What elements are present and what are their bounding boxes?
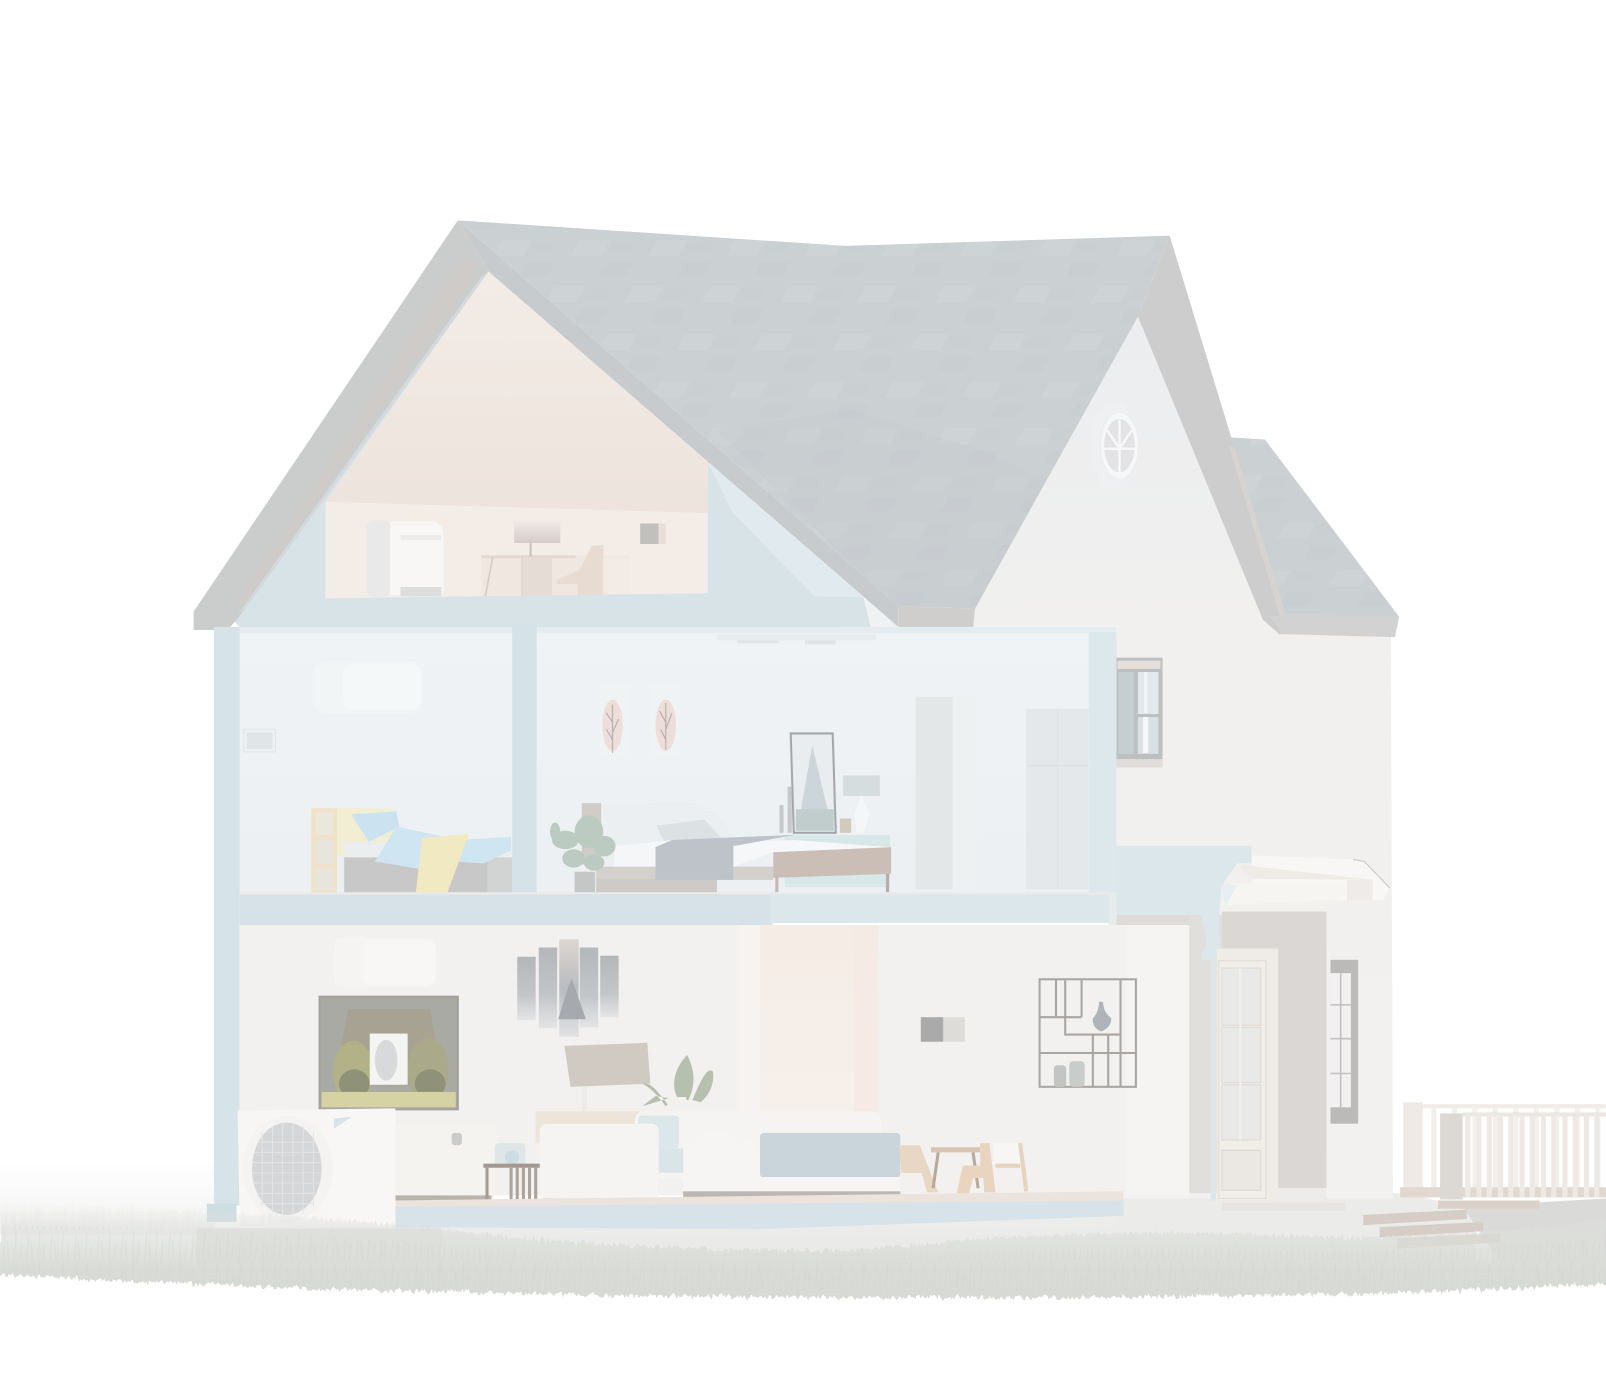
porch overhang section and gutter [1116,846,1252,1201]
exterior upper window [1116,658,1163,767]
closet doors [916,697,976,889]
ground floor slab [207,1191,1124,1229]
nightstand [785,835,890,887]
attic room [326,272,708,598]
main roof plane [458,220,1170,609]
left wall column [214,627,240,1206]
child table and chairs [899,1143,1026,1193]
round attic window [1090,401,1139,491]
cushion and vase [495,1143,525,1167]
television [319,996,459,1110]
wardrobe [1026,709,1089,889]
right wall column [1089,632,1116,896]
attic floor-mounted air handler [367,520,443,597]
entry steps [1363,1210,1501,1249]
entry door [1217,949,1278,1201]
ground fog [0,1163,1475,1275]
attic desk and chairs [481,543,629,596]
second floor slab [240,892,1116,925]
attic wall art [514,520,560,543]
entrance wall [1116,910,1326,1201]
side roof [1138,236,1399,637]
wall shelf with vase [1040,979,1136,1087]
attic insulation band [234,272,878,628]
double bed with plant [550,801,891,895]
door step [1222,1203,1345,1211]
deck railing [1400,1102,1606,1270]
lower exterior window [1330,960,1358,1124]
media console [536,1111,669,1142]
grass [0,1204,1606,1298]
ceiling cassette [717,634,876,644]
ceiling shadow band [240,627,1116,633]
second floor rooms [214,625,1116,1206]
child bed [311,808,512,893]
sofa back [635,1111,881,1178]
table lamp [843,775,880,833]
wall art panels [517,939,619,1037]
armchair centre [540,1124,659,1209]
desk monitor on arm [564,1043,650,1111]
roof gable fascia [194,220,975,630]
exterior wall: right wing [968,317,1393,1198]
side table [483,1164,541,1207]
wall air conditioner: bedroom [313,662,422,713]
room divider column [512,625,537,895]
long sofa [683,1133,900,1204]
standing mirror [779,733,851,833]
wall art: two botanical prints [599,684,681,758]
potted plant [642,1055,713,1109]
wall air conditioner: living room [333,938,436,987]
porch roof section [1222,855,1390,912]
outdoor heat pump on pad [197,1108,441,1265]
wall thermostat [921,1017,965,1042]
ground floor room [240,925,1189,1195]
wall vent [244,729,276,752]
armchair left [391,1124,497,1204]
attic wall thermostat [640,523,666,544]
